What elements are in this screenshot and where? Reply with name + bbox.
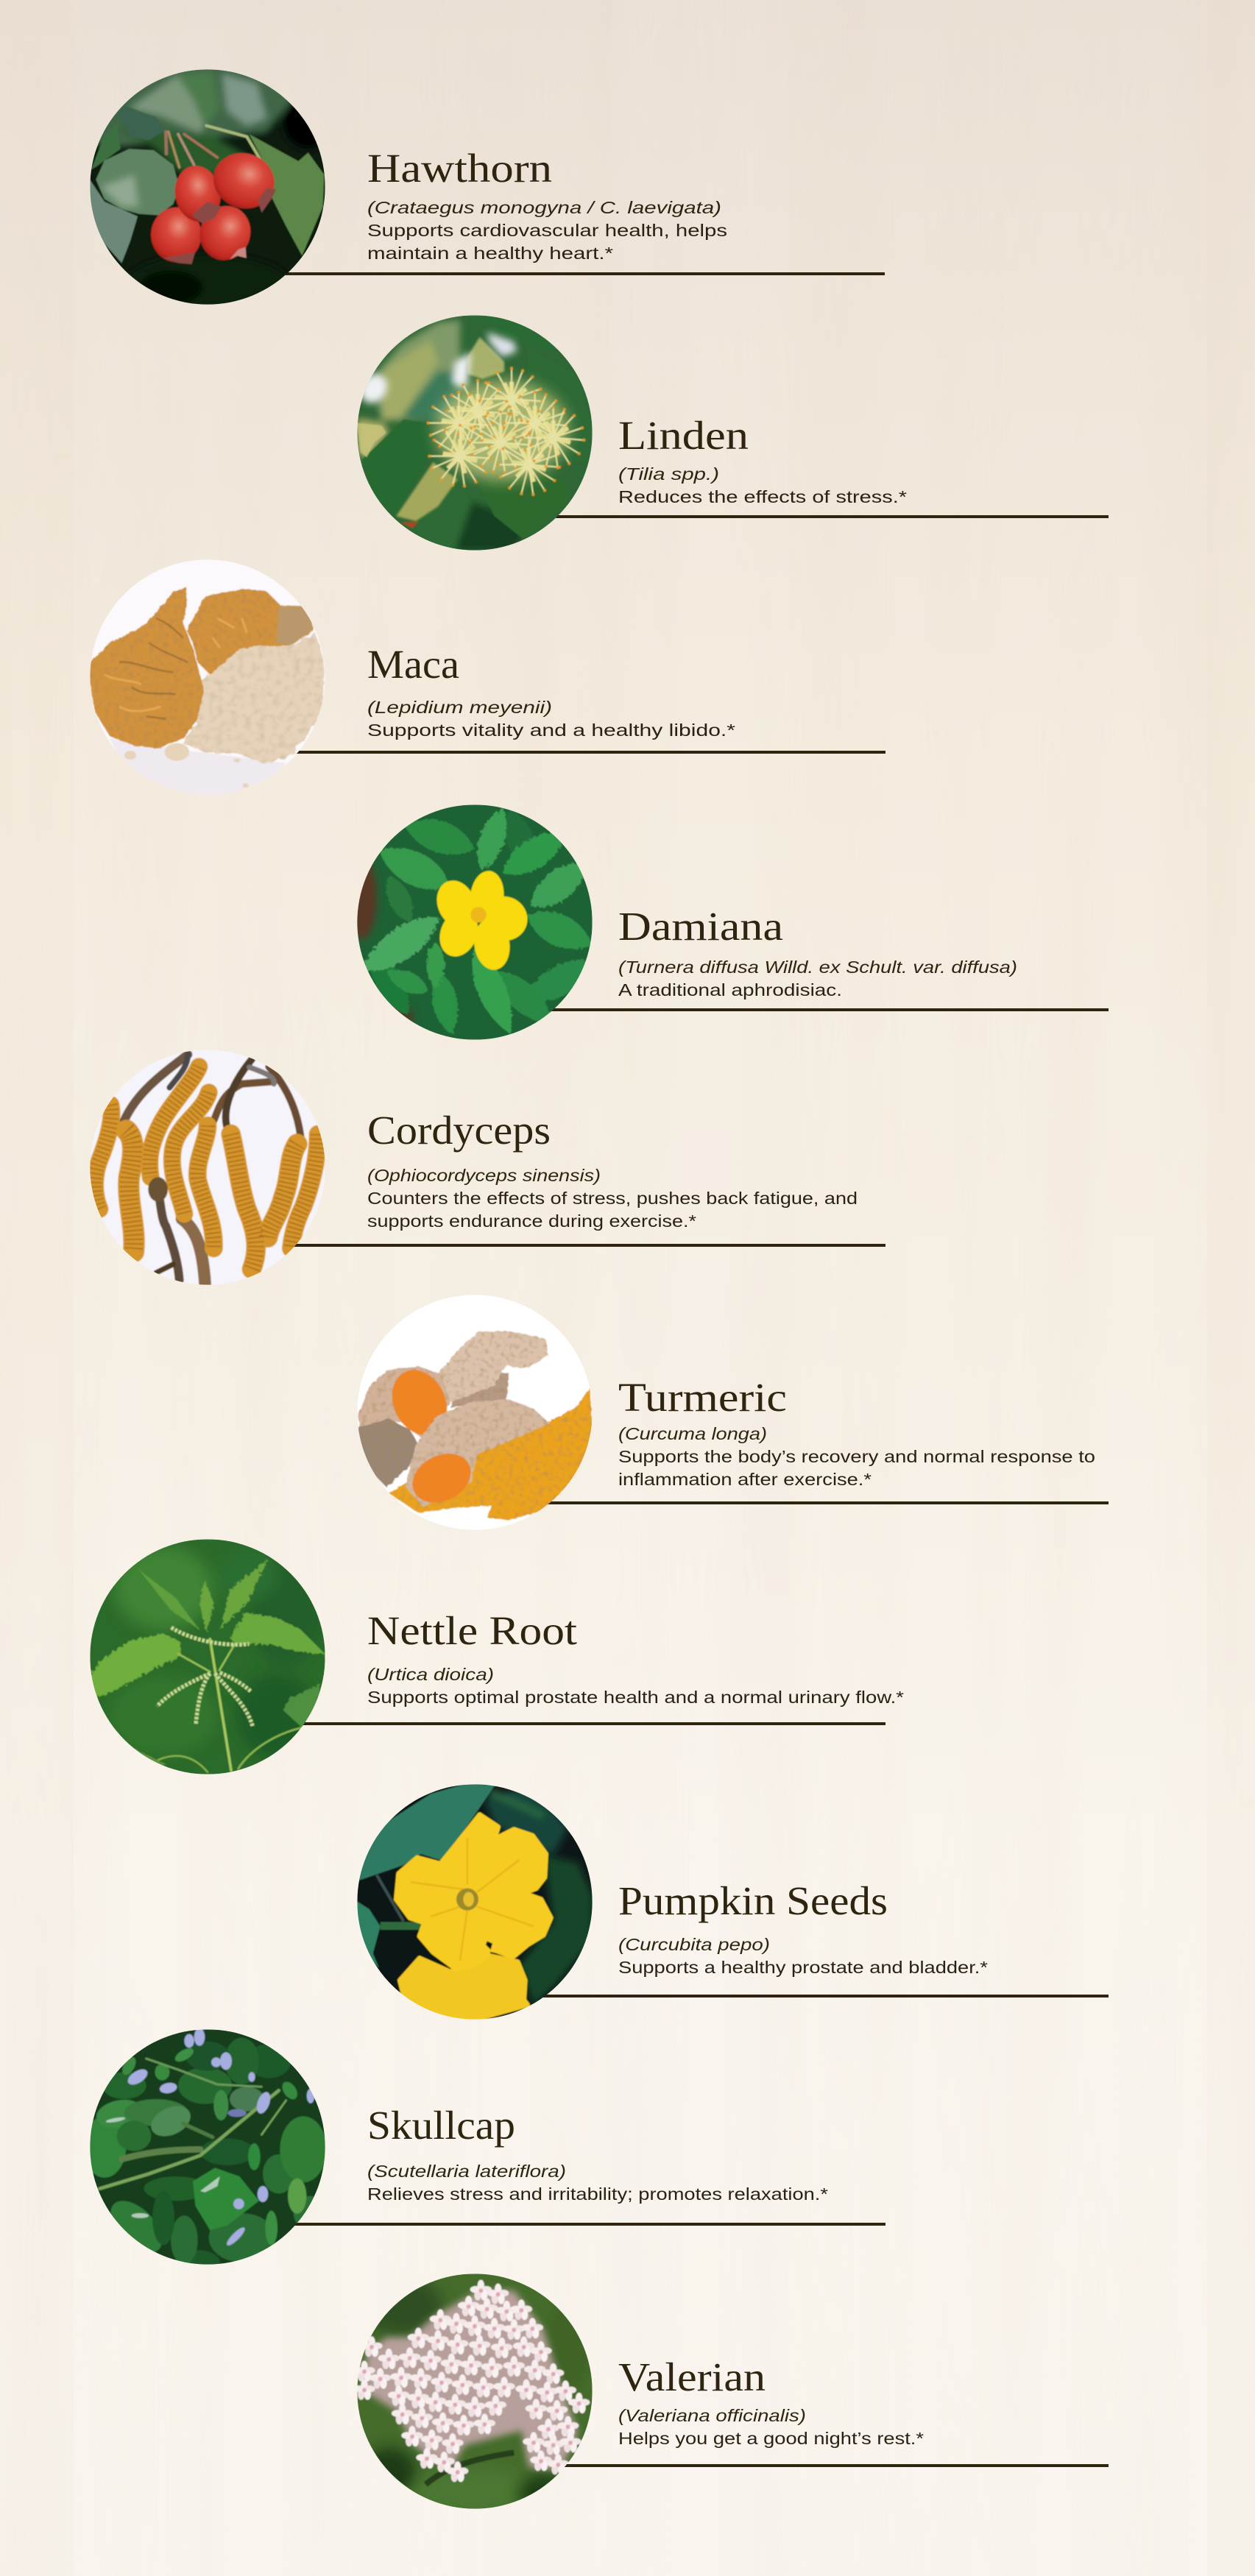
scientific name: (Scutellaria lateriflora) [367, 2162, 566, 2181]
icon: lower yellow blossom [400, 1956, 528, 2020]
icon: teal leaves [357, 1784, 495, 1968]
icon: maca powder [183, 633, 324, 764]
description: Supports cardiovascular health, helps [367, 221, 727, 240]
icon: yellow five-petal flower [430, 869, 533, 972]
leader line [565, 2464, 1109, 2467]
photo: hawthorn berries [90, 69, 325, 305]
leader line [551, 1008, 1109, 1011]
heading: Pumpkin Seeds [618, 1878, 888, 1923]
leader line [556, 515, 1109, 518]
herb row: Linden [355, 315, 1109, 551]
icon: green leaves [83, 2038, 328, 2274]
description: supports endurance during exercise.* [367, 1211, 696, 1231]
heading: Turmeric [618, 1375, 787, 1420]
photo: linden blossom [355, 315, 593, 551]
description: Supports vitality and a healthy libido.* [367, 721, 735, 740]
photo: turmeric root and powder [357, 1295, 594, 1530]
heading: Damiana [618, 904, 783, 949]
scientific name: (Lepidium meyenii) [367, 698, 552, 717]
description: Supports the body’s recovery and normal response to [618, 1447, 1095, 1466]
heading: Skullcap [367, 2103, 515, 2148]
photo: cordyceps [90, 1050, 325, 1285]
icon: purple-blue flowers [125, 2028, 314, 2248]
icon: nettle leaves [90, 1559, 325, 1767]
heading: Linden [618, 413, 749, 458]
description: maintain a healthy heart.* [367, 244, 613, 263]
icon: main yellow blossom [396, 1815, 551, 1970]
herb row: Turmeric [357, 1295, 1109, 1530]
photo: valerian blossoms [353, 2274, 593, 2514]
description: A traditional aphrodisiac. [618, 980, 842, 999]
heading: Valerian [618, 2354, 766, 2399]
scientific name: (Curcuma longa) [618, 1424, 767, 1443]
icon: catkin flower sprays [157, 1627, 252, 1726]
leader line [543, 1995, 1109, 1998]
heading: Hawthorn [367, 146, 552, 191]
herb row: Pumpkin Seeds [357, 1784, 1109, 2020]
icon: serrated green leaves [353, 804, 600, 1039]
icon: orange caterpillar fungus bodies [95, 1066, 318, 1269]
heading: Nettle Root [367, 1608, 577, 1653]
description: Supports optimal prostate health and a normal urinary flow.* [367, 1688, 904, 1707]
photo: maca root and powder [90, 559, 325, 795]
scientific name: (Tilia spp.) [618, 464, 719, 484]
description: Relieves stress and irritability; promotes relaxation.* [367, 2184, 828, 2204]
leader line [294, 2223, 885, 2226]
photo: pumpkin flower [357, 1784, 593, 2020]
herb row: Valerian [353, 2274, 1109, 2514]
description: inflammation after exercise.* [618, 1470, 872, 1489]
scientific name: (Valeriana officinalis) [618, 2406, 806, 2425]
herb row: Maca [90, 559, 885, 795]
icon: stamen flower cluster [427, 367, 585, 496]
icon: red berries [150, 152, 277, 265]
scientific name: (Turnera diffusa Willd. ex Schult. var. diffusa) [618, 958, 1017, 977]
photo: skullcap plant [83, 2028, 328, 2274]
icon: turmeric roots [358, 1331, 550, 1512]
herb row: Cordyceps [90, 1050, 885, 1285]
scientific name: (Curcubita pepo) [618, 1935, 770, 1954]
scientific name: (Crataegus monogyna / C. laevigata) [367, 198, 721, 217]
leader line [303, 1722, 885, 1725]
herb row: Nettle Root [90, 1539, 904, 1774]
photo: nettle plant [90, 1539, 325, 1774]
description: Reduces the effects of stress.* [618, 487, 907, 506]
scientific name: (Urtica dioica) [367, 1665, 494, 1684]
herb row: Hawthorn [80, 60, 885, 314]
icon: turmeric powder [389, 1388, 594, 1521]
heading: Maca [367, 642, 459, 687]
leader line [294, 1244, 885, 1247]
heading: Cordyceps [367, 1108, 551, 1153]
description: Counters the effects of stress, pushes back fatigue, and [367, 1189, 858, 1208]
leader line [286, 272, 885, 275]
herb row: Skullcap [83, 2028, 885, 2274]
icon: blossom cluster [353, 2280, 590, 2482]
photo: damiana flower [347, 804, 600, 1040]
herb row: Damiana [347, 804, 1109, 1040]
description: Supports a healthy prostate and bladder.* [618, 1958, 988, 1977]
icon: right maca root [187, 589, 313, 675]
icon: left maca root [90, 587, 204, 749]
leader line [297, 751, 885, 754]
leader line [548, 1501, 1109, 1504]
scientific name: (Ophiocordyceps sinensis) [367, 1166, 601, 1185]
description: Helps you get a good night’s rest.* [618, 2429, 924, 2448]
